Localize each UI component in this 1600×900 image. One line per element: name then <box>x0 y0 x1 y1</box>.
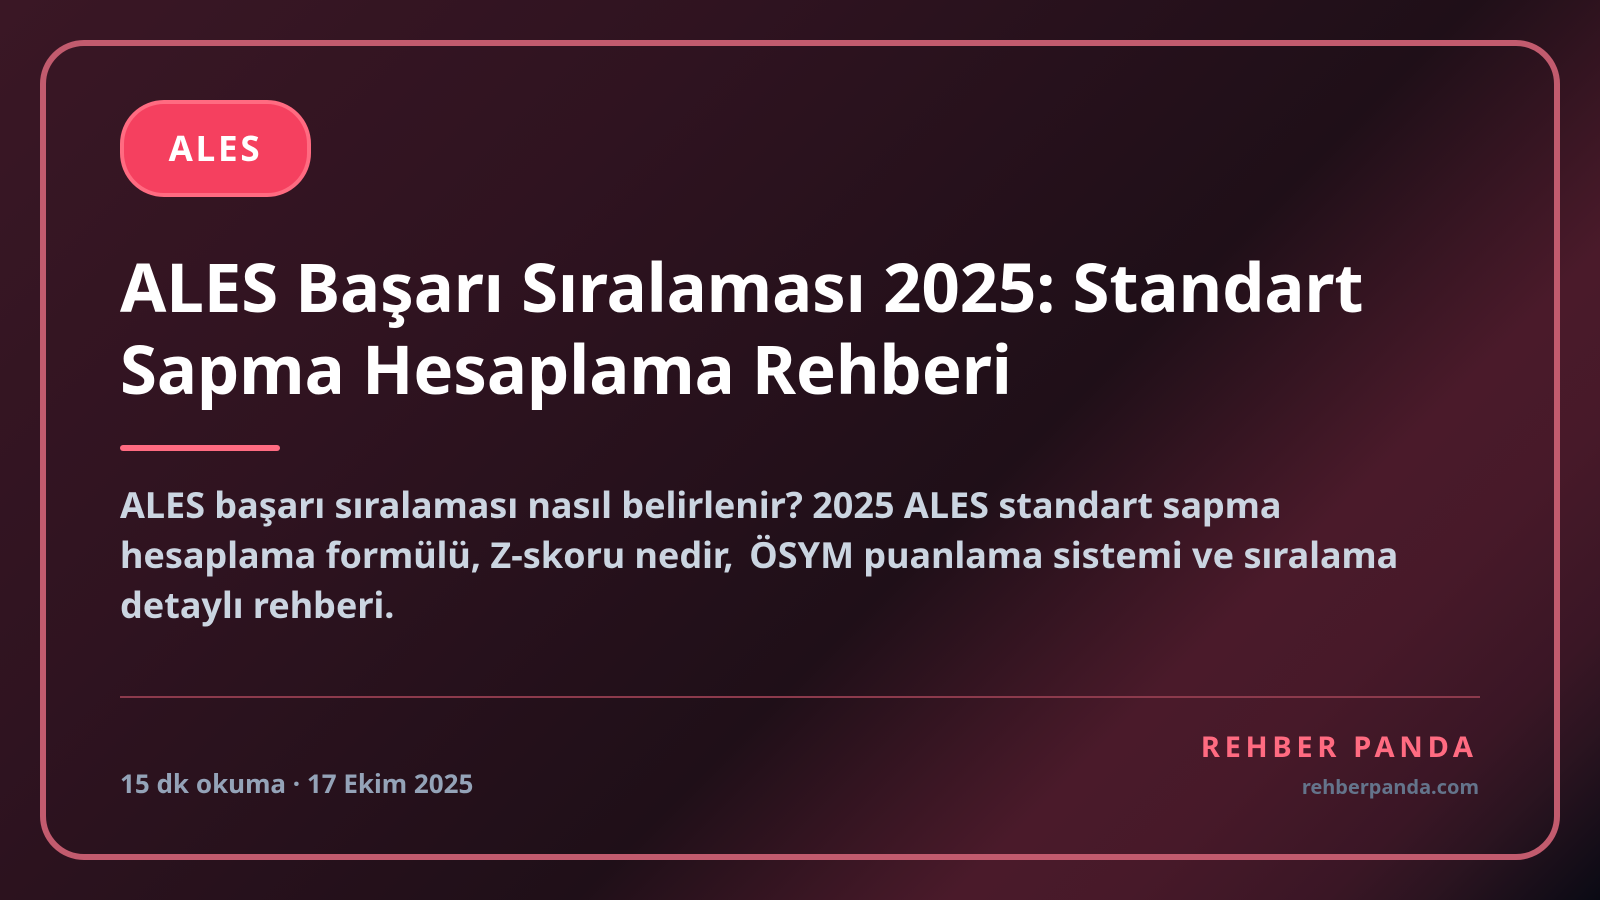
footer divider <box>120 696 1480 698</box>
title: Sapma Hesaplama Rehberi <box>120 322 1012 414</box>
badge: ALES: ALES <box>169 125 262 172</box>
brand name: REHBER PANDA <box>1201 727 1478 766</box>
badge: ALES <box>120 100 311 197</box>
reading time and date: 15 dk okuma · 17 Ekim 2025 <box>120 765 473 801</box>
title <box>120 240 1363 414</box>
description: ALES başarı sıralaması nasıl belirlenir? 2025 ALES standart sapma hesaplama formülü, Z-skoru nedir, ÖSYM puanlama sistemi ve sıralama detaylı rehberi. <box>120 480 1398 629</box>
brand url: rehberpanda.com <box>1302 773 1479 800</box>
accent underline <box>120 445 280 451</box>
title: ALES Başarı Sıralaması 2025: Standart <box>120 240 1363 332</box>
